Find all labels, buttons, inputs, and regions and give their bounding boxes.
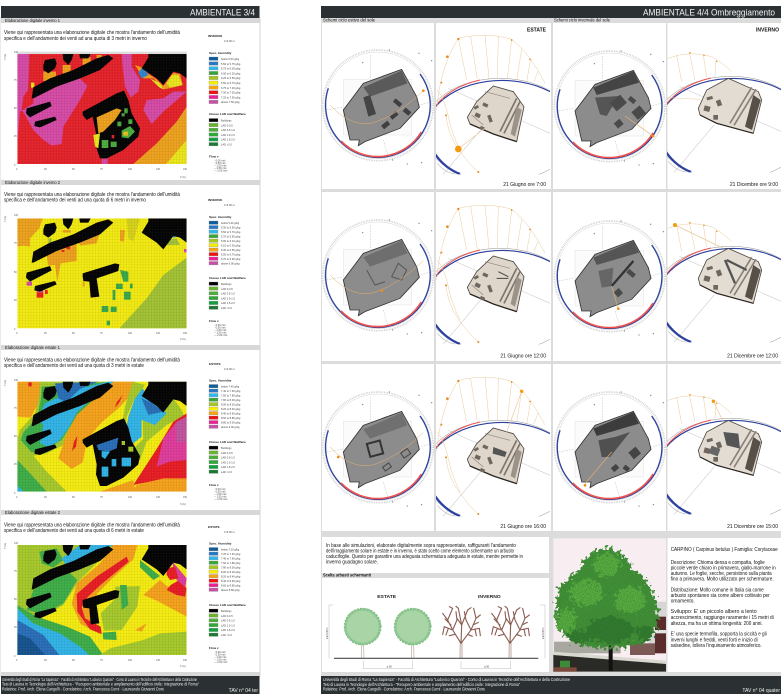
legend: summer 3 m: · 0.50 m/s — [214, 490, 226, 494]
legend: summer 6 m: 8.60 to 8.80 g/kg — [221, 584, 241, 588]
axes labels: 0 — [14, 328, 16, 331]
legend: winter 6 m: Buildings — [221, 282, 232, 286]
axes labels: 100 — [128, 168, 133, 171]
footer left: Università degli Studi di Roma "La Sapienza" - Facoltà di Architettura "Ludovico Quaroni" - Corso di Laurea in Tecniche dell'Architettura e della Costruzione — [2, 677, 197, 682]
text block winter 1: Viene qui rappresentata una elaborazione digitale che mostra l'andamento dell'umidità — [4, 30, 180, 36]
axes labels: 100 — [128, 659, 133, 662]
axes labels: 75 — [100, 332, 103, 335]
elevation: summer and winter shrubs — [327, 594, 545, 669]
legend: summer 6 m: Classe LAD and Wallface — [209, 603, 246, 607]
axes labels: 50 — [72, 332, 75, 335]
axes labels: 25 — [14, 463, 17, 466]
axes labels: 50 — [14, 271, 17, 274]
axes labels: 150 — [183, 332, 188, 335]
heading: shrub choice: Scelta arbusti schermanti — [323, 572, 371, 578]
axes labels: 100 — [128, 332, 133, 335]
footer right: TAV n° 04 quater — [742, 688, 780, 694]
legend: summer 3 m: · 0.00 m/s — [214, 487, 226, 491]
axes labels: 50 — [14, 107, 17, 110]
legend: winter 6 m: 6.50 to 6.70 g/kg — [221, 252, 241, 256]
axes labels: Y (m) — [4, 380, 7, 386]
time: 21 Dicembre 12: 21 Dicembre ore 12:00 — [727, 354, 778, 360]
legend: summer 6 m: Buildings — [221, 609, 232, 613]
legend: winter 6 m: · 0.00 m/s — [214, 323, 226, 327]
axes labels: 150 — [183, 659, 188, 662]
axes labels: 50 — [72, 496, 75, 499]
footer left: TAV n° 04 ter — [229, 688, 258, 694]
heatmap: winter 3 m — [17, 52, 187, 164]
legend: winter 6 m: LAD >2.0 — [221, 306, 232, 310]
axes labels: 25 — [14, 626, 17, 629]
legend: winter 3 m: Buildings — [221, 118, 232, 122]
legend: winter 6 m: Flow v — [209, 319, 219, 323]
time: 21 Giugno 16: 21 Giugno ore 16:00 — [500, 524, 546, 530]
bare tree 1 — [443, 606, 480, 658]
axes labels: 50 — [72, 659, 75, 662]
legend: summer 3 m: LAD 1.5-2.0 — [221, 465, 235, 469]
axes labels: 75 — [100, 659, 103, 662]
legend: summer 6 m: LAD 1.0-1.5 — [221, 623, 235, 627]
legend: summer 3 m — [209, 362, 246, 501]
axes labels: 100 — [14, 214, 19, 217]
legend: winter 6 m: LAD 1.0-1.5 — [221, 296, 235, 300]
sun diagram: winter 9:00 plan — [554, 50, 665, 166]
legend: summer 6 m: 8.40 to 8.60 g/kg — [221, 579, 241, 583]
legend: summer 6 m — [208, 525, 246, 664]
legend: winter 6 m: LAD 0-0.5 — [221, 287, 233, 291]
legend: winter 6 m: 6.30 to 6.50 g/kg — [221, 248, 241, 252]
sun diagram: winter 15:00 plan — [554, 391, 665, 507]
legend: winter 3 m: 6.25 to 6.50 g/kg — [221, 76, 241, 80]
legend: summer 6 m: 7.80 to 8.00 g/kg — [221, 566, 241, 570]
title left: AMBIENTALE 3/4 — [190, 8, 255, 18]
legend: winter 3 m: INVERNO — [208, 34, 223, 38]
heading: summer 1: Elaborazione digitale estate 1 — [5, 345, 61, 350]
sun diagram: summer 12:00 plan — [323, 219, 433, 335]
text block: carpino description: E' una specie termofila, sopporta la siccità e gli — [671, 632, 767, 638]
axes labels: X (m) — [180, 665, 186, 668]
heatmap: summer 6 m — [17, 545, 187, 655]
axes labels: 0 — [16, 332, 18, 335]
legend: summer 6 m: Flow v — [209, 646, 219, 650]
sun diagram: summer 7:00 plan — [323, 49, 433, 165]
text block: carpino description: altezza, ma ha un ottima longevità: 200 anni. — [671, 621, 763, 627]
axes labels: X (m) — [180, 338, 186, 341]
legend: summer 3 m: -- 1.00 m/s — [214, 492, 227, 496]
legend: winter 6 m: Classe LAD and Wallface — [209, 276, 246, 280]
heading: winter 2: Elaborazione digitale inverno 2 — [5, 180, 61, 185]
text block: carpino description: arbusto spontaneo sia come albero coltivato per — [671, 593, 770, 599]
dimensions: min 8.00 m — [327, 628, 329, 639]
heading: summer cycle: Schemi ciclo estivo del sole — [323, 18, 376, 22]
panel: right sheet Ambientale 4/4 — [321, 6, 781, 694]
text block winter 2 — [4, 192, 180, 204]
axes labels: 25 — [44, 332, 47, 335]
axes labels: 100 — [14, 542, 19, 545]
legend: summer 6 m: ESTATE — [208, 525, 220, 529]
text block: carpino description: Sviluppo: E' un piccolo albero a lento — [671, 609, 757, 615]
time: 21 Giugno 12: 21 Giugno ore 12:00 — [500, 354, 546, 360]
section bars left — [1, 18, 260, 676]
axes labels: 75 — [14, 407, 17, 410]
legend: winter 6 m: LAD 1.5-2.0 — [221, 301, 235, 305]
legend: winter 3 m: 6.00 to 6.25 g/kg — [221, 71, 241, 75]
axes labels: 0 — [16, 496, 18, 499]
legend: summer 6 m: LAD 0.5-1.0 — [221, 619, 235, 623]
axes labels: 25 — [14, 135, 17, 138]
axes labels: 0 — [16, 168, 18, 171]
text block: simulation conclusion — [326, 543, 523, 566]
text block winter 2: specifica e dell'andamento dei venti ad una quota di 6 metri in inverno — [4, 198, 146, 204]
axes labels: 0 — [14, 655, 16, 658]
axes labels: X (m) — [180, 176, 186, 179]
legend: winter 6 m: above 6.90 g/kg — [221, 262, 240, 266]
green tree 2 — [394, 608, 431, 658]
footer left — [1, 676, 260, 694]
legend: summer 6 m: Spec. Humidity — [209, 542, 232, 546]
legend: summer 6 m: 8.00 to 8.20 g/kg — [221, 570, 241, 574]
text block summer 1 — [4, 358, 180, 369]
axes labels: 75 — [14, 79, 17, 82]
legend: summer 3 m: 7.40 to 7.60 g/kg — [221, 389, 241, 393]
legend: winter 3 m: LAD >2.0 — [221, 142, 232, 146]
green tree 1 — [344, 608, 381, 658]
axes labels: 50 — [14, 435, 17, 438]
axes labels: 50 — [14, 598, 17, 601]
legend: winter 3 m: 7.25 to 7.50 g/kg — [221, 95, 241, 99]
legend: summer 3 m: Buildings — [221, 446, 232, 450]
text block: simulation conclusion: caducifoglie. Questo per garantire una adeguata schermatura adeguata in estate, mentre permette in — [326, 554, 523, 560]
label: inverno trees: INVERNO — [478, 594, 501, 600]
dimensions: a.50 — [484, 665, 490, 669]
text block winter 1: specifica e dell'andamento dei venti ad una quota di 3 metri in inverno — [4, 36, 147, 42]
legend: summer 6 m: 7.60 to 7.80 g/kg — [221, 561, 241, 565]
legend: winter 3 m: LAD 0.5-1.0 — [221, 128, 235, 132]
legend: summer 3 m: ESTATE — [209, 362, 221, 366]
legend: summer 3 m: -- 1.50 m/s — [214, 494, 227, 498]
legend: winter 6 m: -- 1.00 m/s — [214, 328, 227, 332]
legend: winter 6 m: · 0.50 m/s — [214, 326, 226, 330]
legend: winter 3 m: 5.50 to 5.75 g/kg — [221, 62, 241, 66]
header bar left — [1, 6, 260, 18]
dimensions: min 8.00 m — [543, 628, 545, 639]
legend: winter 3 m: 7.00 to 7.25 g/kg — [221, 91, 241, 95]
axes labels: 25 — [14, 299, 17, 302]
text block: carpino description: accrescimento, raggiunge raramente i 15 metri di — [671, 615, 774, 621]
text block: carpino description: inverni lunghi e freddi, venti forti e inizio di — [671, 638, 758, 644]
axes labels: 125 — [156, 168, 161, 171]
axes labels: 125 — [156, 496, 161, 499]
legend: summer 6 m: -- 1.50 m/s — [214, 658, 227, 662]
footer left: Tesi di Laurea in Tecnologie dell'Architettura - "Recupero ambientale e ampliamento dell'edificio civile: Integrazione di Roma" — [2, 682, 199, 686]
legend: summer 6 m: · 0.50 m/s — [214, 652, 226, 656]
legend: summer 3 m: LAD >2.0 — [221, 470, 232, 474]
legend: winter 3 m: Classe LAD and Wallface — [209, 112, 246, 116]
heatmap: summer 3 m — [17, 382, 187, 492]
ground line — [334, 657, 538, 660]
legend: winter 3 m: · 0.50 m/s — [214, 161, 226, 165]
legend: winter 6 m: --- 2.00 m/s — [214, 333, 228, 337]
legend: summer 3 m: --- 2.00 m/s — [214, 497, 228, 501]
legend: summer 6 m: -- 1.00 m/s — [214, 655, 227, 659]
axes labels: 150 — [183, 168, 188, 171]
sun diagram: summer 16:00 view — [423, 377, 577, 524]
sun diagram: summer 12:00 view — [423, 205, 577, 352]
legend: summer 3 m: LAD 1.0-1.5 — [221, 460, 235, 464]
footer right: Tesi di Laurea in Tecnologie dell'Architettura - "Recupero ambientale e ampliamento dell'edificio civile: Integrazione di Roma" — [323, 682, 520, 687]
text block summer 2: specifica e dell'andamento dei venti ad una quota di 6 metri in estate — [4, 528, 144, 534]
axes labels: 75 — [14, 570, 17, 573]
label: estate: ESTATE — [527, 28, 547, 34]
footer right — [321, 676, 781, 694]
text block: carpino description: fino a primavera. Molto utilizzato per schermature. — [671, 576, 774, 582]
axes labels: 125 — [156, 659, 161, 662]
legend: summer 6 m: 7.20 to 7.40 g/kg — [221, 552, 241, 556]
legend: winter 3 m: 6.50 to 6.75 g/kg — [221, 81, 241, 85]
text block summer 1: Viene qui rappresentata una elaborazione digitale che mostra l'andamento dell'umidità — [4, 358, 180, 364]
time: 21 Dicembre 9: 21 Dicembre ore 9:00 — [730, 182, 778, 188]
legend: summer 3 m: 8.20 to 8.40 g/kg — [221, 407, 241, 411]
axes labels: X (m) — [180, 503, 186, 506]
legend: summer 3 m: LAD 0.5-1.0 — [221, 456, 235, 460]
legend: winter 3 m: below 5.50 g/kg — [221, 57, 240, 61]
axes labels: 25 — [44, 659, 47, 662]
legend: summer 3 m: 7.80 to 8.00 g/kg — [221, 398, 241, 402]
text block: carpino description — [671, 547, 778, 649]
axes labels: Y (m) — [4, 216, 7, 222]
panel: left sheet Ambientale 3/4 — [0, 6, 260, 694]
legend: summer 6 m: 8.20 to 8.40 g/kg — [221, 574, 241, 578]
axes labels: 125 — [156, 332, 161, 335]
legend: winter 6 m: 6.70 to 6.90 g/kg — [221, 257, 241, 261]
axes labels: 25 — [44, 168, 47, 171]
text block: carpino description: piccole verde chiaro in primavera, giallo-marrone in — [671, 566, 776, 572]
legend: winter 6 m: INVERNO — [208, 198, 223, 202]
axes labels: 25 — [44, 496, 47, 499]
label: inverno: INVERNO — [756, 28, 779, 34]
legend: summer 3 m: 8.80 to 9.00 g/kg — [221, 420, 241, 424]
legend: winter 6 m: Spec. Humidity — [209, 215, 232, 219]
legend: winter 6 m: 5.70 to 5.90 g/kg — [221, 234, 241, 238]
legend: summer 3 m: Classe LAD and Wallface — [209, 440, 246, 444]
legend: summer 6 m: 7.40 to 7.60 g/kg — [221, 556, 241, 560]
sun diagram: summer 7:00 view — [423, 35, 577, 182]
axes labels — [4, 51, 188, 668]
axes labels: 100 — [128, 496, 133, 499]
axes labels: 0 — [14, 492, 16, 495]
legend: summer 3 m: z=3.00 m — [224, 367, 235, 371]
heading: winter 1: Elaborazione digitale inverno 1 — [5, 18, 61, 23]
axes labels: 150 — [183, 496, 188, 499]
text block: simulation conclusion: dell'irraggiamento solare in estate e in inverno, è stato scelto come elemento schermante un arbusto — [326, 548, 514, 554]
legend: winter 3 m: LAD 0-0.5 — [221, 123, 233, 127]
legend: winter 6 m: LAD 0.5-1.0 — [221, 292, 235, 296]
heading: winter cycle: Schemi ciclo invernale del sole — [554, 18, 611, 22]
text block winter 2: Viene qui rappresentata una elaborazione digitale che mostra l'andamento dell'umidità — [4, 192, 180, 198]
legend: summer 3 m: 7.60 to 7.80 g/kg — [221, 394, 241, 398]
text block summer 2 — [4, 522, 180, 534]
legend: winter 6 m: below 5.30 g/kg — [221, 221, 240, 225]
legend: summer 6 m: z=6.00 m — [224, 530, 235, 534]
legend: winter 3 m: --- 2.00 m/s — [214, 168, 228, 172]
legend: winter 3 m: z=3.00 m — [224, 39, 235, 43]
legend: summer 3 m: 8.00 to 8.20 g/kg — [221, 402, 241, 406]
dimensions: a.50 — [387, 665, 392, 669]
legend: summer 3 m: 8.40 to 8.60 g/kg — [221, 412, 241, 416]
bare tree 2 — [492, 606, 529, 658]
legend: winter 6 m: 6.10 to 6.30 g/kg — [221, 244, 241, 248]
legend: summer 6 m: · 0.00 m/s — [214, 650, 226, 654]
legend: winter 3 m: -- 1.00 m/s — [214, 164, 227, 168]
legend: winter 6 m: z=6.00 m — [224, 203, 235, 207]
legend: summer 6 m: LAD 1.5-2.0 — [221, 628, 235, 632]
axes labels: Y (m) — [4, 54, 7, 60]
time: 21 Giugno 7: 21 Giugno ore 7:00 — [503, 182, 546, 188]
axes labels: 0 — [14, 164, 16, 167]
axes labels: 75 — [100, 496, 103, 499]
text block summer 1: specifica e dell'andamento dei venti ad una quota di 3 metri in estate — [4, 363, 144, 369]
legend: winter 3 m — [208, 34, 246, 172]
text block winter 1 — [4, 30, 180, 42]
legend: summer 3 m: Flow v — [209, 483, 219, 487]
text block: carpino description: salsedine, tollera l'inquinamento atmosferico. — [671, 643, 762, 649]
legend: summer 3 m: 8.60 to 8.80 g/kg — [221, 416, 241, 420]
axes labels: 0 — [16, 659, 18, 662]
text block: simulation conclusion: inverno guadagno solare. — [326, 560, 378, 566]
heading: summer 2: Elaborazione digitale estate 2 — [5, 510, 61, 515]
right sheet background — [321, 18, 781, 676]
photo: hornbeam tree — [553, 538, 666, 672]
legend: summer 6 m: above 8.80 g/kg — [221, 588, 240, 592]
legend: winter 3 m: -- 1.50 m/s — [214, 166, 227, 170]
legend: winter 3 m: 6.75 to 7.00 g/kg — [221, 86, 241, 90]
sun diagram: winter 12:00 plan — [554, 220, 665, 336]
time: 21 Dicembre 15: 21 Dicembre ore 15:00 — [727, 524, 778, 530]
axes labels: 100 — [14, 51, 19, 54]
footer right: Università degli Studi di Roma "La Sapienza" - Facoltà di Architettura "Ludovico Quaroni" - Corso di Laurea in Tecniche dell'Architettura e della Costruzione — [323, 677, 571, 682]
dimensions — [327, 605, 545, 669]
legend: winter 3 m: Spec. Humidity — [209, 51, 232, 55]
legend: summer 6 m: below 7.20 g/kg — [221, 548, 240, 552]
legend: winter 6 m: 5.30 to 5.50 g/kg — [221, 226, 241, 230]
legend: summer 3 m: LAD 0-0.5 — [221, 451, 233, 455]
legend: winter 3 m: Flow v — [209, 154, 219, 158]
legend: winter 3 m: 5.75 to 6.00 g/kg — [221, 67, 241, 71]
axes labels: 75 — [14, 242, 17, 245]
legend: winter 3 m: LAD 1.5-2.0 — [221, 138, 235, 142]
axes labels: 75 — [100, 168, 103, 171]
axes labels: Y (m) — [4, 543, 7, 549]
legend: winter 3 m: LAD 1.0-1.5 — [221, 133, 235, 137]
legend: winter 6 m: 5.50 to 5.70 g/kg — [221, 230, 241, 234]
legend: winter 6 m: -- 1.50 m/s — [214, 330, 227, 334]
legend: summer 6 m: --- 2.00 m/s — [214, 660, 228, 664]
legend: summer 6 m: LAD >2.0 — [221, 633, 232, 637]
legend: summer 6 m: LAD 0-0.5 — [221, 614, 233, 618]
sun diagram: winter 9:00 view — [654, 52, 781, 180]
sun diagram: winter 15:00 view — [654, 394, 781, 522]
axes labels: 100 — [14, 379, 19, 382]
legend: winter 3 m: · 0.00 m/s — [214, 158, 226, 162]
legend: summer 3 m: below 7.40 g/kg — [221, 384, 240, 388]
sun diagram: summer 16:00 plan — [323, 391, 433, 507]
left sheet frame — [0, 18, 260, 676]
legend: winter 6 m — [208, 198, 246, 337]
legend: winter 3 m: above 7.50 g/kg — [221, 100, 240, 104]
text block summer 2: Viene qui rappresentata una elaborazione digitale che mostra l'andamento dell'umidità — [4, 522, 180, 528]
label: estate trees: ESTATE — [377, 594, 397, 600]
text block: carpino description: ornamento. — [671, 598, 695, 604]
legend: summer 3 m: Spec. Humidity — [209, 378, 232, 382]
text block: carpino description: Distribuzione: Molto comune in Italia sia come — [671, 588, 764, 594]
legend: summer 3 m: above 9.00 g/kg — [221, 425, 240, 429]
header bar right — [321, 6, 781, 18]
white cells — [322, 23, 781, 672]
footer left: Relatrice: Prof. Arch. Elena Cangelli - Correlatrice: Arch. Francesca Cerni - Laureando Giovanni Dore — [2, 686, 165, 691]
sun diagram: winter 12:00 view — [654, 222, 781, 350]
footer right: Relatrice: Prof. Arch. Elena Cangelli - Correlatrice: Arch. Francesca Cerni - Laureando Giovanni Dore — [323, 687, 486, 692]
legend: winter 6 m: 5.90 to 6.10 g/kg — [221, 239, 241, 243]
heatmap: winter 6 m — [17, 218, 187, 328]
axes labels: 50 — [72, 168, 75, 171]
text block: carpino description: Descrizione: Chioma densa e compatta, foglie — [671, 560, 765, 566]
text block: simulation conclusion: In base alle simulazioni, elaborate digitalmente sopra rappresentate, raffiguranti l'andamento — [326, 543, 516, 549]
text block: carpino description: autunno. Le foglie, secche, persistono sulla pianta — [671, 571, 772, 577]
